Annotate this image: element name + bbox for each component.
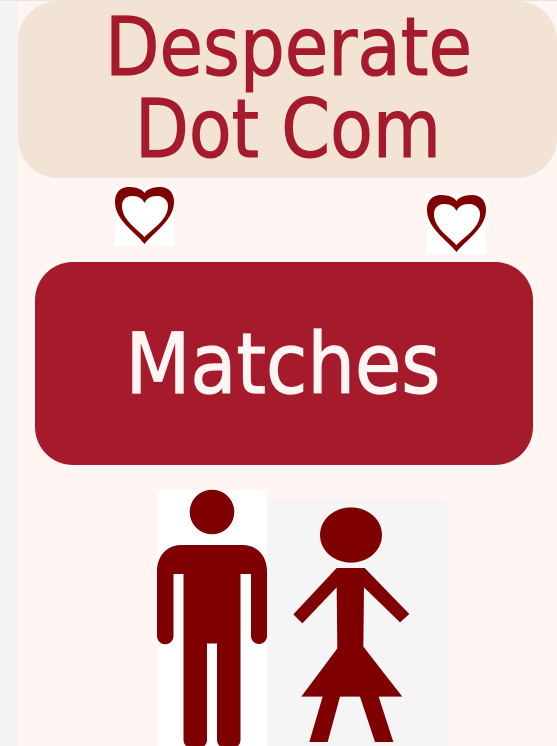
matches panel <box>35 262 533 465</box>
matches label: Matches <box>126 315 440 413</box>
icon: left heart <box>115 187 174 246</box>
icon: right heart <box>427 194 486 254</box>
title: first line: Desperate <box>105 1 472 95</box>
icon: man figure <box>157 490 267 746</box>
title panel <box>18 1 557 178</box>
title: second line: Dot Com <box>135 83 441 177</box>
icon: woman figure <box>267 500 447 746</box>
